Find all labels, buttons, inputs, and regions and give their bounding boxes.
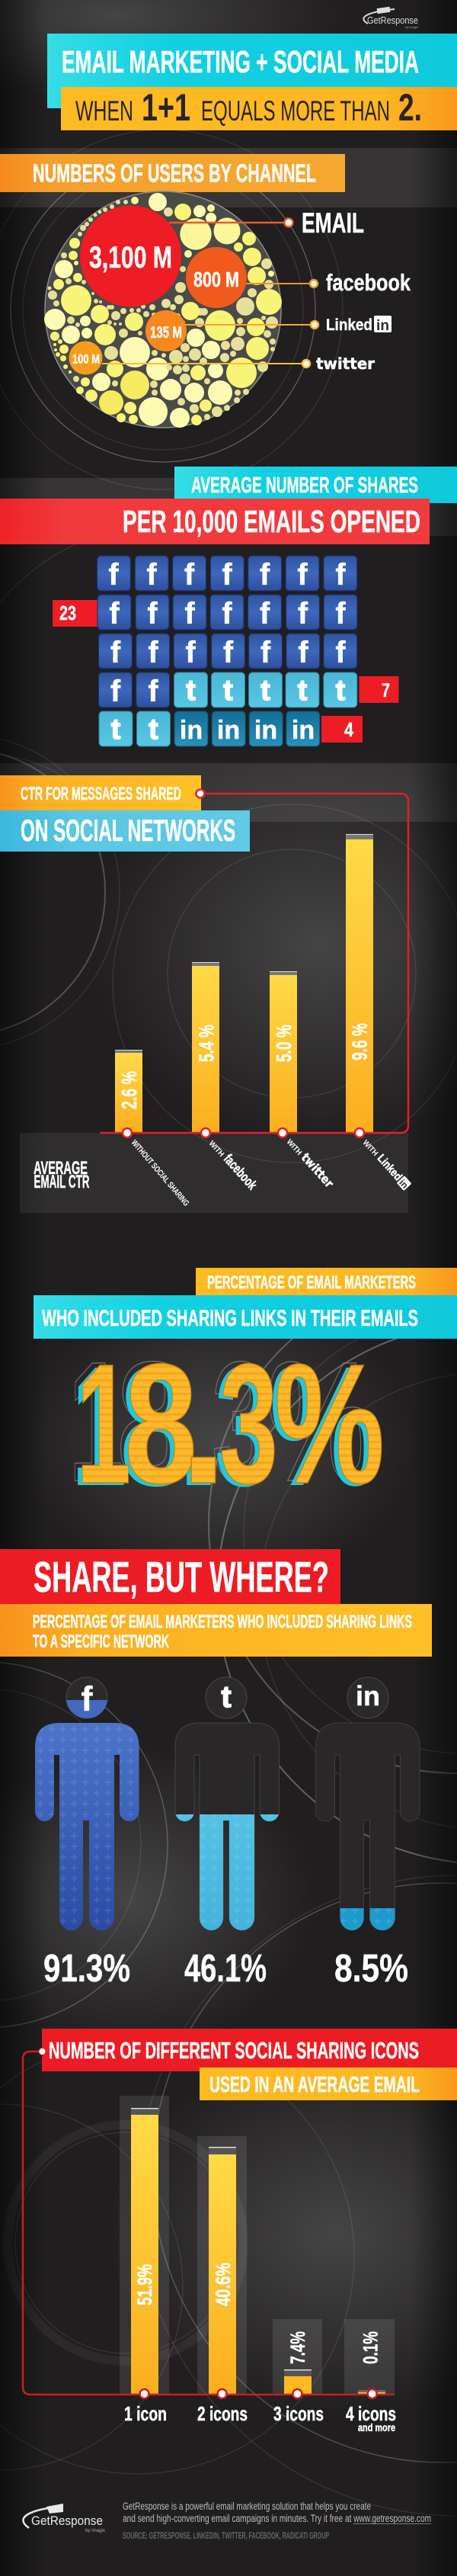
icon grid: shares: t: [298, 675, 308, 707]
stat: 91.3%: 91.3%: [43, 1946, 130, 1990]
bubble: email 3,100 M: [80, 206, 181, 306]
figure: linkedin person: in: [356, 1680, 380, 1711]
connector line: CTR: [100, 790, 408, 1137]
tag: linkedin 4: [321, 716, 363, 743]
logo: GetResponse top: [363, 7, 418, 29]
section heading: percentage of marketers: [34, 1268, 457, 1339]
axis labels: CTR: facebook: [221, 1151, 260, 1193]
footer text: [123, 2501, 431, 2541]
icon grid: shares: f: [335, 597, 346, 630]
icon grid: shares: f: [335, 636, 346, 669]
icon grid: shares: t: [111, 714, 121, 746]
big number: 18.3%: 3: [215, 1331, 273, 1522]
panel: average email ctr label area: AVERAGE: [34, 1158, 88, 1179]
title line 2: 1+1: [142, 86, 190, 129]
bubble chart: [44, 191, 282, 428]
sources: SOURCE: GETRESPONSE, LINKEDIN, TWITTER, FACEBOOK, RADICATI GROUP: [123, 2532, 329, 2541]
legend: linkedin: in: [376, 318, 389, 334]
bar: 2 icons 40.6%: [209, 2147, 236, 2394]
big number: 18.3%: %: [270, 1331, 380, 1522]
icon grid: shares: in: [217, 716, 240, 745]
axis labels: icons: 3 icons: [273, 2402, 324, 2425]
section heading: CTR: CTR FOR MESSAGES SHARED: [21, 784, 181, 804]
icon grid: shares: f: [148, 675, 158, 708]
axis labels: icons: [124, 2402, 396, 2433]
icon grid: shares: f: [297, 558, 308, 592]
tag: linkedin 4: 4: [344, 718, 353, 741]
title line 2: WHEN: [75, 95, 133, 127]
axis labels: CTR: WITHOUT SOCIAL SHARING: [129, 1138, 190, 1208]
icon grid: shares: f: [184, 558, 195, 592]
axis labels: icons: and more: [358, 2421, 395, 2433]
icon grid: shares: f: [260, 597, 270, 630]
tag: twitter 7: 7: [382, 680, 390, 701]
icon grid: shares: f: [335, 558, 346, 592]
icon grid: shares: f: [222, 558, 232, 592]
big number: 18.3%: 1: [76, 1329, 131, 1519]
bubble: email 3,100 M: 3,100 M: [89, 241, 172, 274]
text banner: specific network: [0, 1604, 432, 1657]
icon grid: shares: in: [254, 716, 277, 745]
text banner: specific network: TO A SPECIFIC NETWORK: [33, 1631, 169, 1652]
big number: 18.3%: 8: [120, 1331, 193, 1522]
big number: 18.3%: .: [175, 1331, 222, 1522]
icon grid: shares: t: [260, 675, 270, 707]
bar: with linkedin 9.6%: [346, 834, 373, 1133]
bubble: twitter 100 M: 100 M: [72, 352, 100, 366]
icon grid: shares: t: [223, 675, 233, 707]
big number: 18.3%: 8: [117, 1326, 190, 1517]
big number: 18.3%: 3: [219, 1329, 278, 1519]
axis labels: CTR: WITH: [207, 1140, 225, 1159]
big number: 18.3%: 3: [212, 1326, 270, 1517]
tag: facebook 23: 23: [59, 601, 76, 624]
axis labels: icons: 2 icons: [197, 2402, 248, 2425]
axis labels: icons: 4 icons: [346, 2402, 396, 2425]
bubble: linkedin 135 M: 135 M: [150, 324, 182, 342]
icon grid: shares: f: [260, 558, 270, 592]
logo: GetResponse top: by imagix: [405, 25, 418, 29]
title banner: [47, 34, 457, 130]
bar: with twitter 5.0%: [270, 971, 297, 1133]
axis labels: CTR: WITH: [285, 1138, 303, 1157]
axis labels: CTR: in: [397, 1177, 411, 1191]
icon grid: shares: f: [110, 636, 121, 669]
section heading: different icons: [42, 2029, 457, 2100]
icon grid: shares: f: [146, 558, 157, 592]
legend: facebook: [246, 269, 411, 296]
tag: twitter 7: [360, 676, 399, 703]
bar: 4 icons 0.1%: [358, 2331, 385, 2395]
bar: 3 icons 7.4%: 7.4%: [286, 2331, 309, 2364]
legend: twitter: [102, 354, 375, 373]
stat: 46.1%: 46.1%: [184, 1946, 267, 1990]
icon grid: shares: t: [149, 714, 158, 746]
icon grid: shares: f: [298, 636, 308, 669]
bubble: facebook 800 M: 800 M: [193, 268, 239, 291]
figure: twitter person: t: [221, 1680, 232, 1714]
section heading: numbers of users: NUMBERS OF USERS BY CHANNEL: [33, 159, 316, 188]
icon grid: shares: f: [222, 597, 232, 630]
bar: 2 icons 40.6%: 40.6%: [212, 2263, 235, 2306]
title line 2: [75, 86, 422, 129]
legend: linkedin: [185, 316, 391, 334]
figure: facebook person: [35, 1677, 139, 1930]
axis labels: CTR: twitter: [299, 1150, 337, 1191]
icon grid: shares: f: [260, 636, 271, 669]
bar: without social sharing 2.6%: [115, 1050, 142, 1133]
logo: GetResponse footer: by imagix: [85, 2529, 105, 2533]
icon grid: shares: f: [108, 558, 119, 592]
icon grid: shares: f: [223, 636, 234, 669]
legend: email: EMAIL: [302, 207, 364, 239]
icon grid: shares: f: [185, 636, 196, 669]
icon grid: shares: t: [336, 675, 346, 707]
bar: without social sharing 2.6%: 2.6 %: [117, 1071, 141, 1109]
icon grid: shares: in: [180, 716, 203, 745]
stat: 8.5%: 8.5%: [334, 1946, 408, 1990]
icon grid: shares: f: [110, 675, 121, 708]
bar chart: number of icons: [120, 2096, 395, 2395]
panel: average email ctr label area: EMAIL CTR: [34, 1172, 90, 1192]
bar: with facebook 5.4%: 5.4 %: [195, 1025, 218, 1062]
axis labels: CTR: WITH: [361, 1139, 379, 1158]
connector line: icons: [23, 2048, 395, 2398]
bar: 4 icons 0.1%: 0.1%: [360, 2331, 382, 2364]
bar: 1 icon 51.9%: [131, 2108, 158, 2394]
bar: 1 icon 51.9%: 51.9%: [133, 2264, 156, 2305]
legend: twitter: twitter: [316, 354, 375, 373]
bar: with linkedin 9.6%: 9.6 %: [347, 1023, 372, 1060]
icon grid: shares: t: [186, 675, 196, 707]
bubble: twitter 100 M: [69, 342, 102, 375]
bubble: linkedin 135 M: [145, 310, 187, 351]
section heading: share but where: [0, 1549, 340, 1604]
footer text: GetResponse is a powerful email marketing solution that helps you create: [123, 2501, 371, 2512]
legend: email: [169, 207, 364, 239]
icon grid: shares: f: [147, 597, 158, 630]
section heading: numbers of users: [0, 154, 345, 192]
icon grid: shares: f: [298, 597, 308, 630]
icon grid: shares: f: [109, 597, 120, 630]
legend: linkedin: Linked: [326, 316, 372, 334]
big number: 18.3%: .: [180, 1329, 227, 1519]
bubble: facebook 800 M: [186, 247, 247, 308]
big number: 18.3%: 1: [72, 1331, 126, 1522]
title line 2: 2.: [398, 86, 422, 129]
icon grid: shares: f: [184, 597, 195, 630]
legend: facebook: facebook: [326, 269, 411, 296]
big number: 18.3%: %: [274, 1329, 385, 1519]
big number: 18.3%: 8: [124, 1329, 197, 1519]
bar: with facebook 5.4%: [192, 962, 219, 1133]
figure: linkedin person: [315, 1677, 420, 1930]
bar chart: CTR: [115, 834, 373, 1133]
axis labels: icons: 1 icon: [124, 2402, 167, 2425]
logo: GetResponse footer: [23, 2504, 105, 2533]
big number: 18.3%: [69, 1326, 385, 1522]
icon grid: shares: f: [148, 636, 158, 669]
big number: 18.3%: %: [267, 1326, 377, 1517]
figure: twitter person: [175, 1677, 279, 1930]
figure: facebook person: f: [81, 1679, 93, 1718]
axis labels: CTR: Linked: [375, 1152, 404, 1183]
bar: with twitter 5.0%: 5.0 %: [272, 1025, 296, 1062]
section heading: CTR: [0, 775, 250, 852]
tag: facebook 23: [53, 600, 97, 627]
bar: 3 icons 7.4%: [284, 2331, 312, 2394]
big number: 18.3%: 1: [69, 1326, 123, 1517]
logo: GetResponse footer: GetResponse: [31, 2514, 103, 2528]
icon grid: shares: in: [292, 716, 315, 745]
panel: average email ctr label area: [20, 1133, 408, 1213]
subheading: ON SOCIAL NETWORKS: [21, 814, 235, 848]
logo: GetResponse top: GetResponse: [367, 14, 418, 26]
icon grid: shares: [97, 556, 357, 746]
section heading: average shares: [0, 467, 457, 544]
axis labels: CTR: [129, 1134, 412, 1208]
